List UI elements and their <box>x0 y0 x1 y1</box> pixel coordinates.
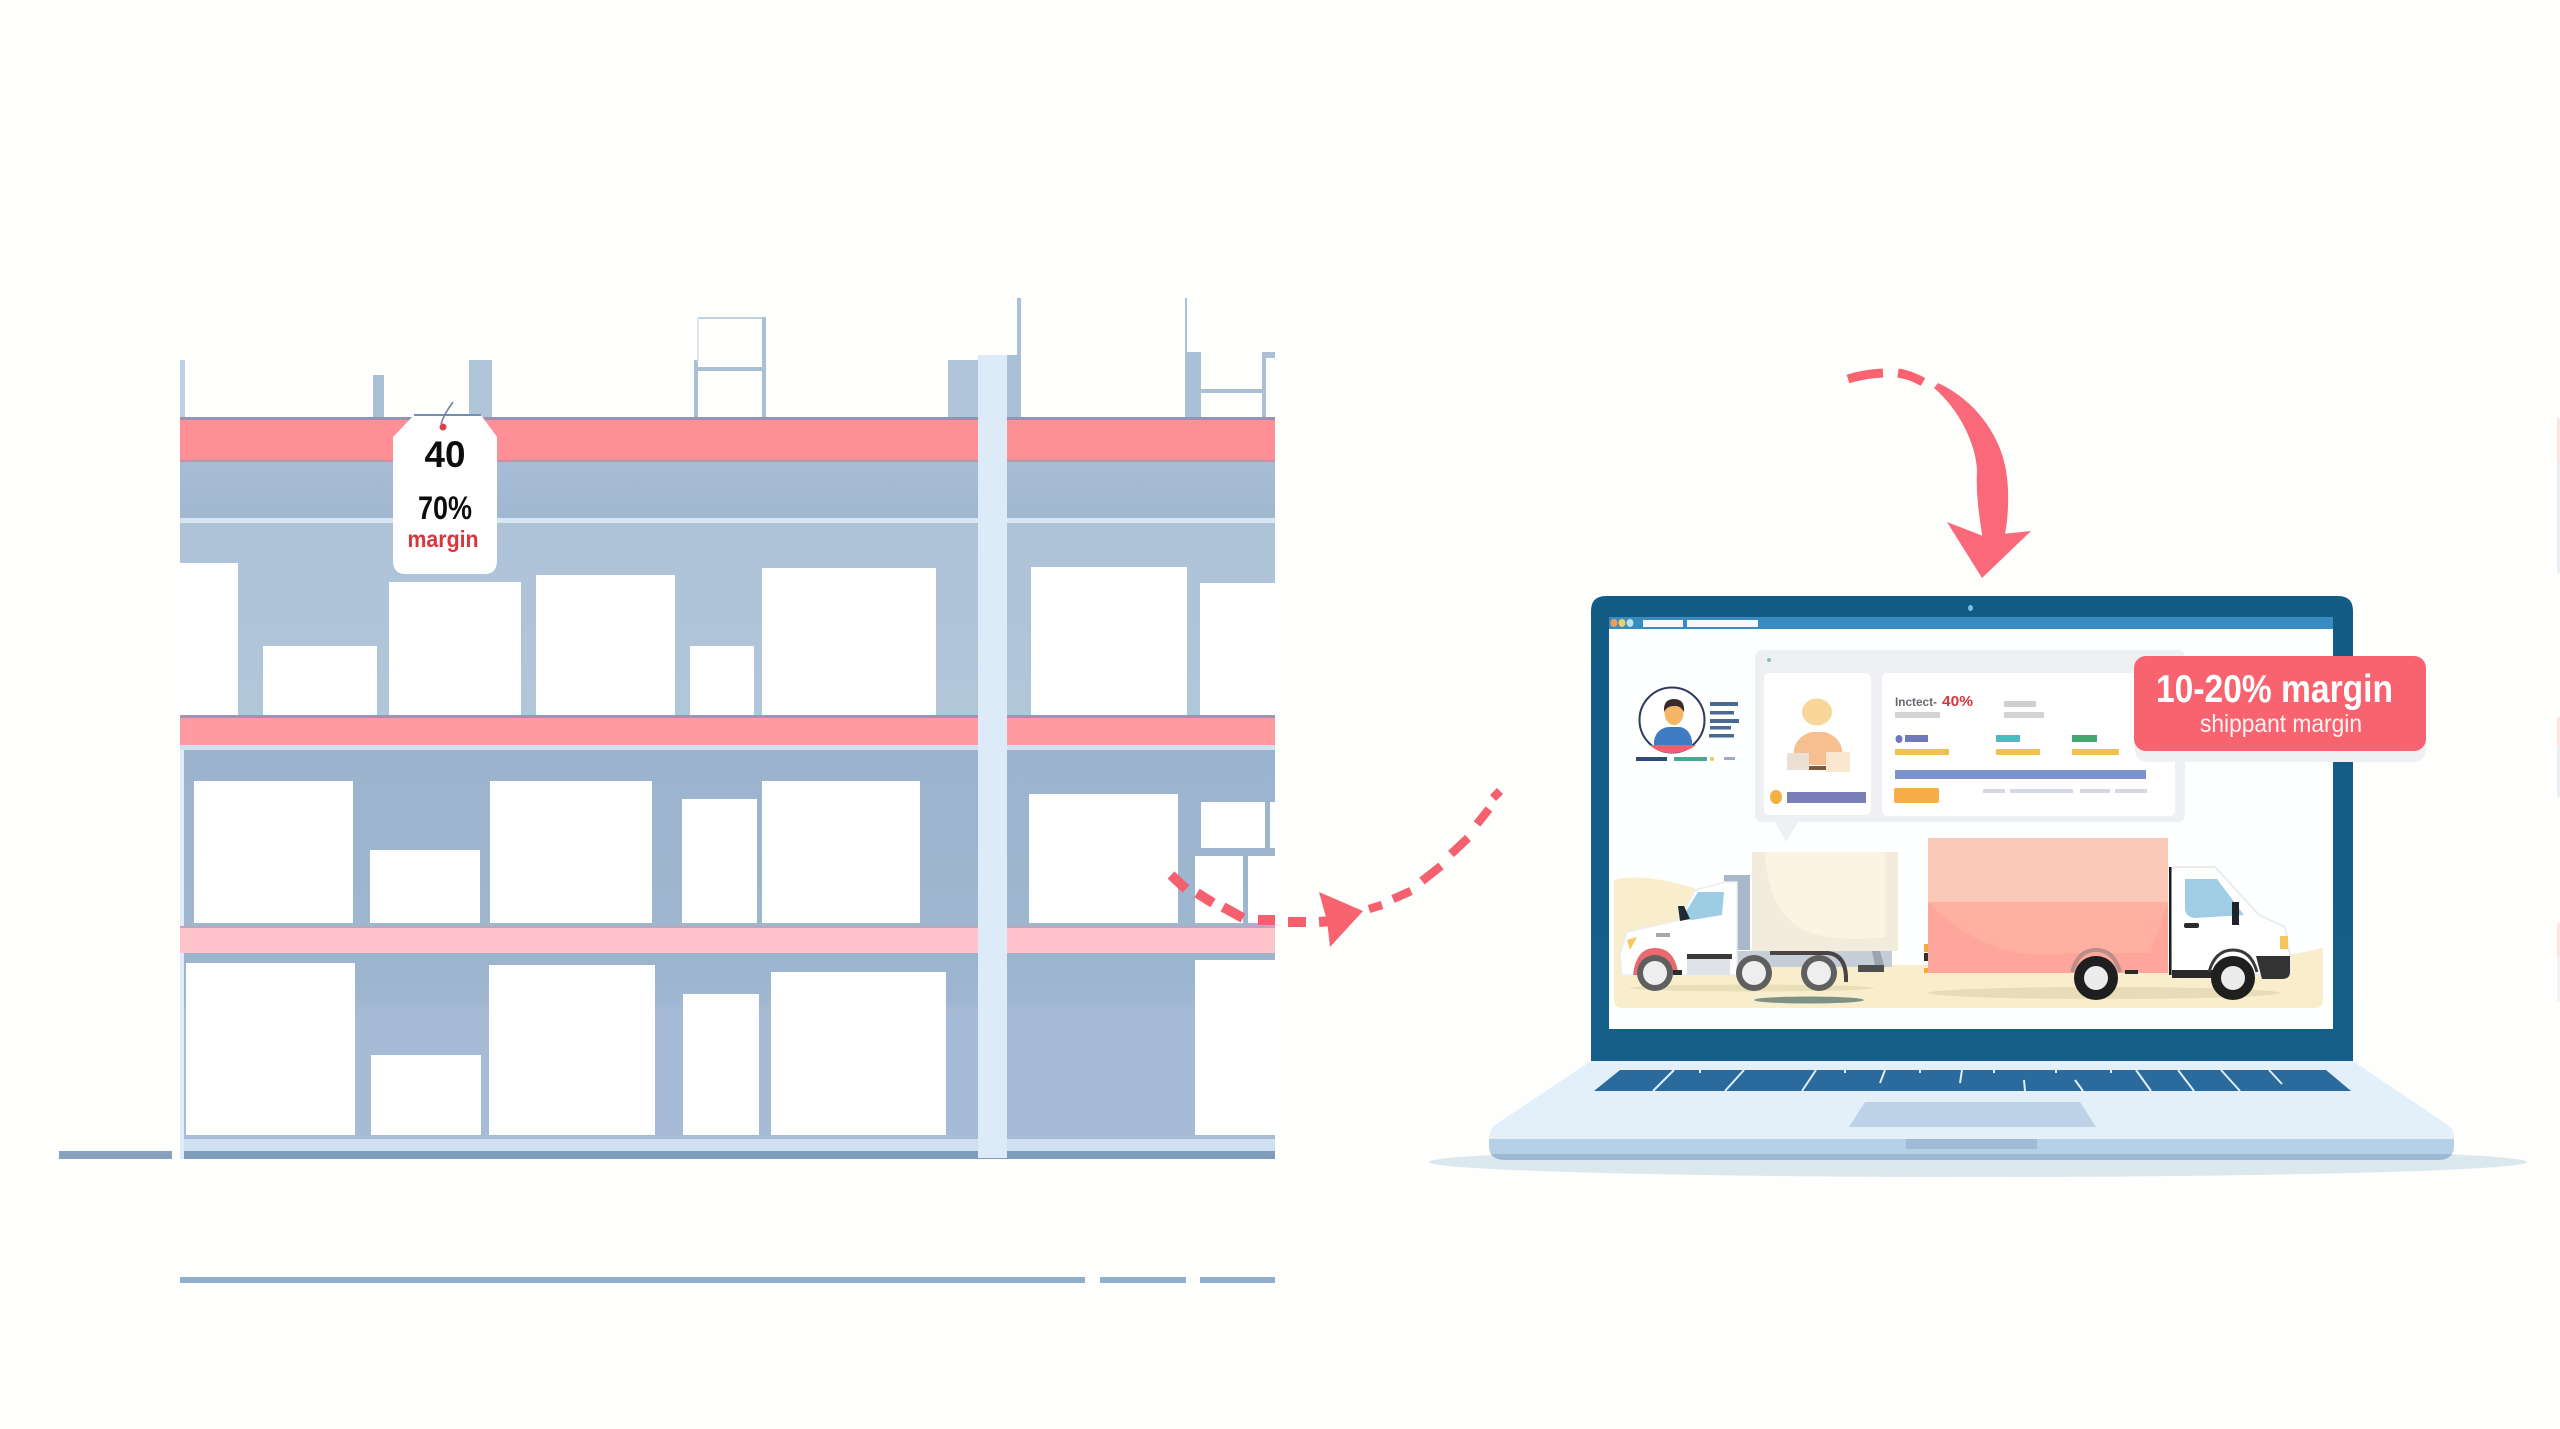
arrowhead <box>1947 522 2031 578</box>
laptop <box>1429 596 2527 1177</box>
stat percentage: 40% <box>1942 693 1973 710</box>
cab window <box>2185 879 2244 918</box>
callout shadow <box>2135 668 2426 762</box>
dashes <box>1848 373 1923 382</box>
boxes: bottom bay <box>186 960 1275 1135</box>
rack floor and ground line <box>59 750 1275 1159</box>
tag top edge and string <box>414 402 481 430</box>
dashboard panel <box>1755 650 2185 842</box>
laptop lid <box>1591 596 2353 1061</box>
road shadow <box>1928 987 2280 999</box>
lower baseline rule <box>180 1277 1275 1283</box>
chassis <box>1730 951 1892 967</box>
headlight and grille <box>1627 937 1637 950</box>
callout subheading: shippant margin <box>2200 710 2362 738</box>
cab window <box>1682 892 1724 920</box>
callout: shipping margin <box>2134 656 2426 762</box>
laptop base <box>1489 1061 2454 1160</box>
stat label: Inctect- <box>1895 695 1937 709</box>
shelf beam: top <box>180 417 1275 462</box>
arrowhead <box>1319 892 1363 947</box>
cargo box <box>1928 838 2168 973</box>
browser title bar <box>1609 617 2333 629</box>
arrow: curved arrow down to laptop <box>1848 373 2031 578</box>
profile avatar <box>1640 688 1704 753</box>
rack body bands <box>180 462 1275 1139</box>
delivery scene <box>1614 838 2323 1008</box>
card: person <box>1764 673 1871 815</box>
tapered shaft <box>1934 383 2008 540</box>
cab column <box>1724 875 1750 950</box>
wheels <box>2074 956 2255 1000</box>
camera <box>1968 605 1973 611</box>
screen <box>1609 617 2333 1029</box>
red wheel arch <box>1633 948 1678 975</box>
road shadows <box>1630 984 1874 992</box>
wheels <box>1637 955 1837 991</box>
shelf beam: lower <box>180 926 1275 953</box>
boxes: top bay <box>180 563 1275 715</box>
headlight and bumper <box>2280 936 2288 949</box>
tag number: 40 <box>424 434 466 475</box>
warehouse rack <box>59 298 1275 1159</box>
dashed trail after arrowhead <box>1369 791 1500 909</box>
right edge sliver <box>2557 418 2560 1002</box>
wheel arches <box>2072 950 2120 972</box>
tag percentage: 70% <box>418 490 472 526</box>
cargo box <box>1752 852 1898 951</box>
tail lights <box>1924 944 1928 973</box>
ground <box>1614 877 2323 1008</box>
cab <box>2170 867 2290 975</box>
chassis <box>2172 970 2216 978</box>
truck: large pink truck <box>1924 838 2290 1000</box>
tag margin label: margin <box>408 526 478 552</box>
profile text lines <box>1636 702 1739 761</box>
rooftop posts and frames <box>180 298 1275 417</box>
trackpad <box>1849 1102 2096 1127</box>
cab <box>1620 882 1737 975</box>
laptop shadow <box>1429 1147 2527 1177</box>
stat bars <box>1894 701 2147 803</box>
boxes: middle bay <box>194 781 1275 923</box>
shelf beam: middle <box>180 715 1275 745</box>
card: stats <box>1882 673 2175 816</box>
central upright column <box>978 355 1007 1158</box>
dashed tail into arrowhead <box>1171 875 1332 922</box>
callout heading: 10-20% margin <box>2156 668 2393 711</box>
tag body <box>393 415 497 574</box>
truck: small box truck <box>1620 852 1898 1004</box>
arrow: dashed from rack to laptop <box>1171 791 1500 947</box>
fender <box>1770 953 1846 982</box>
keyboard <box>1594 1070 2351 1091</box>
price tag <box>393 402 497 574</box>
callout body <box>2134 656 2426 751</box>
